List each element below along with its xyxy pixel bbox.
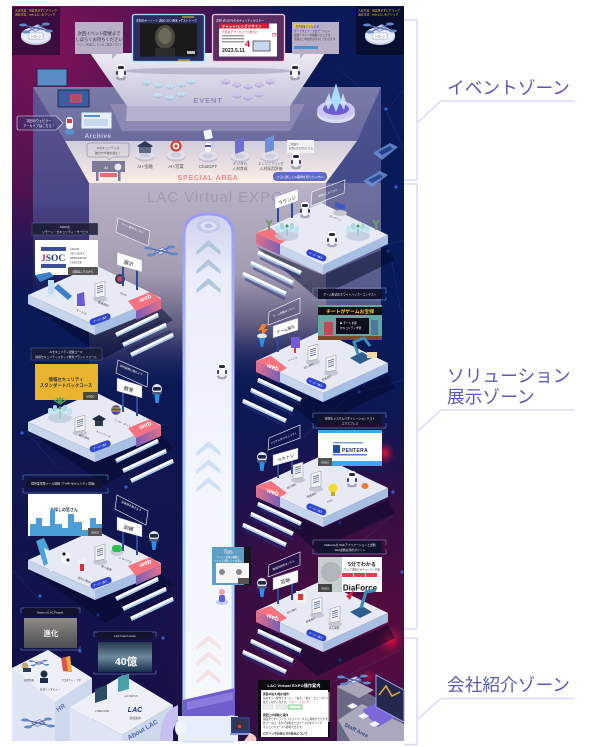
sign: 訓練 (117, 517, 142, 555)
icon: globe: インターネット (113, 418, 132, 428)
callout: JSOC drone (116, 218, 150, 246)
exhibit: ChatGPT (198, 129, 218, 169)
panel: entry guide right (356, 7, 404, 55)
screen: game (318, 305, 382, 340)
icon: crystal podium (317, 83, 355, 123)
sign: 診断 (273, 570, 298, 604)
header: course: 情報セキュリティスタッフ教育プラットフォーム (35, 355, 97, 359)
title: LAC Virtual EXPO: LAC Virtual EXPO (147, 189, 284, 206)
screen: mail training city (0, 494, 102, 536)
screen: yellow course: VIDEO (86, 394, 95, 398)
icon: hover robot (152, 384, 162, 403)
web tag: web (137, 420, 153, 432)
icon: graduation cap: ネットワーク (95, 429, 112, 439)
sign: AI (92, 161, 125, 181)
button: special area link (273, 172, 327, 181)
panel: Tips: ウイルス対策ソフトの違い (214, 558, 242, 562)
panel: bottom center stage (160, 688, 256, 741)
web tag: web (137, 558, 153, 570)
zone: solution: ソリューション (447, 366, 570, 386)
screen: video event: 次回のキーノート 講演 CEO 西本 ×ゲストトーク (136, 18, 197, 22)
screen: JSOC logo: OPERATION (70, 256, 88, 260)
icon: report (305, 597, 324, 624)
icon: report: 関連資料 (306, 491, 318, 499)
icon: report (93, 544, 112, 572)
steps (243, 379, 301, 426)
screen: security event: 2023.5.11 (222, 48, 245, 54)
icon: drone (144, 246, 178, 256)
callout: course: 研究施策に触れよう (119, 364, 144, 377)
callout: Pentera: システムのセキュリティ (270, 431, 298, 445)
icon: certificate: 導入事例 (329, 626, 340, 630)
callout: info bubble: ゲートウェイ・プロモーション (294, 29, 331, 33)
icon: hover robot (257, 578, 267, 597)
zone: event (404, 20, 574, 180)
heading: Staff Area: Staff Area (343, 722, 370, 740)
icon: doc: LAC WATCH (124, 695, 138, 698)
sign: 教育 (117, 378, 142, 416)
background scene (12, 6, 406, 741)
event stage (90, 53, 325, 121)
icon: stamp card (329, 202, 347, 223)
icon: report (321, 355, 338, 382)
screen: Pentera: PENTERA (342, 448, 368, 454)
exhibit: engineer evaluation (258, 135, 285, 171)
panel: hall structure (33, 87, 381, 383)
panel: Vision video (21, 608, 80, 650)
panel: JSOC exhibit (28, 218, 178, 358)
icon: report (93, 281, 109, 308)
header: DiaForce: Web診断必須のポイント (335, 548, 366, 552)
screen: JSOC logo: 詳細はこちらから (73, 270, 94, 274)
screen: DiaForce: DiaForce (343, 584, 378, 592)
screen: game: セキュリティ学習 (340, 326, 362, 330)
header: Pentera: 現場もシステムペネトレーションテスト (325, 416, 375, 420)
event tiles: blue group (142, 79, 196, 101)
screen: Pentera: VIDEO (321, 460, 329, 464)
callout: event waiting message (75, 22, 123, 59)
callout: training (115, 495, 148, 525)
screen: JSOC logo: SECURITY (70, 252, 86, 256)
panel: entry guide left: ドローン (31, 36, 42, 38)
icon: LAC logo: LAC (128, 707, 143, 714)
zone: solution (404, 184, 574, 629)
header: course (31, 348, 102, 360)
callout: course (116, 360, 148, 387)
icon: archive kiosk robot (64, 117, 74, 135)
icon: book (75, 292, 87, 316)
callout: lounge: 休憩はこちらから (317, 187, 338, 198)
sign: AI: AI (104, 165, 108, 170)
icon: doc: CYBER GRID (95, 711, 109, 713)
screen: video event (132, 14, 204, 62)
icon: hover robot (149, 531, 159, 550)
callout: lounge (311, 180, 345, 206)
screen: security event: チャット×シングアサイン (222, 24, 262, 28)
header: DiaForce: DiaForceの Webアプリケーションと診断 (324, 543, 376, 547)
icon: speaker: JSOC (119, 291, 128, 297)
icon: report: 関連資料 (97, 300, 109, 308)
icon: HR interview: 社員インタビュー (40, 687, 60, 691)
screen: security event: !? (272, 33, 277, 39)
panel: About LAC tower (70, 674, 173, 742)
icon: red book: 他社の動向 (77, 576, 92, 585)
button: details (89, 439, 112, 453)
callout: info bubble: 次回開催のお知らせ (295, 24, 319, 28)
zone: solution: 展示ゾーン (447, 387, 535, 407)
icon: left stage robot (116, 64, 126, 80)
callout: info bubble (292, 22, 339, 59)
icon: report (303, 344, 320, 370)
icon: book: サービス (75, 308, 87, 316)
header: DiaForce (313, 540, 386, 554)
heading: EVENT: EVENT (193, 96, 223, 105)
icon: globe (111, 405, 132, 428)
sign: 訓練: 訓練 (123, 524, 134, 533)
screen: security event: 4 (245, 39, 250, 49)
callout: event waiting message: 次回イベント開催まで (78, 30, 120, 37)
exhibit: digital talent (230, 137, 250, 171)
icon: green button: トライアル (118, 556, 133, 565)
icon: phone (36, 538, 58, 572)
callout: robot message: ご相談や (289, 142, 299, 146)
zone: company (404, 638, 574, 744)
panel: Tips: サイバー攻撃の種類と (217, 555, 239, 559)
screen: JSOC logo: JSOC (41, 254, 65, 264)
icon: special area robot (291, 153, 301, 169)
panel: operation guide: するとそのブースへ移動できます。 (263, 725, 304, 729)
icon: hover robot (257, 452, 267, 471)
icon: robot arm (350, 338, 377, 364)
button: Pentera: ブースへ進む (308, 505, 324, 514)
icon: monitor (230, 717, 251, 735)
callout: game: ゲーム体験はこちら (272, 306, 296, 318)
panel: operation guide: 画面の拡大/縮小操作 (263, 692, 289, 696)
icon: report: 関連資料 (305, 616, 317, 624)
panel: special area (65, 129, 357, 183)
icon: report: 関連資料 (321, 374, 333, 382)
button: game: ブースへ進む (308, 379, 324, 388)
panel: LAC brand video: 40億 (115, 655, 138, 668)
panel: Staff Area (337, 674, 404, 741)
header: JSOC: JSOCの (60, 225, 70, 229)
icon: report (286, 462, 305, 490)
icon: satellite (35, 272, 72, 300)
steps (116, 314, 173, 355)
icon: table and plant (48, 397, 72, 423)
screen: DiaForce: ウェブ診断のセキュリティ対策 (344, 568, 380, 572)
icons: floating cars (363, 143, 398, 187)
zone: event: イベントゾーン (447, 78, 570, 98)
exhibit: ChatGPT: ChatGPT (199, 164, 217, 169)
icon: panda robot (61, 552, 71, 564)
screen: mail training city: VIDEO (91, 530, 99, 534)
icon: report: 紹介資料 (78, 433, 90, 441)
button: details (90, 576, 112, 590)
panel: entry guide left: 入室方法：何度見せずにクリック (15, 8, 57, 12)
screen: DiaForce (318, 557, 382, 592)
exhibit: AI x sales: AI×営業 (168, 163, 184, 170)
icon: report: 紹介資料 (303, 362, 315, 370)
header: JSOC: リモート・セキュリティ・サービス (42, 229, 88, 234)
screen: security event: 次回 ゼロからのセキュリティセミナー (216, 18, 264, 22)
steps (243, 630, 301, 677)
panel: operation guide: 拡大しながら見ます。スマートフォンで (263, 700, 310, 704)
exhibit: AI x sales (166, 140, 186, 170)
screen: mail training city: お探しの皆さん (50, 506, 78, 512)
panel: operation guide: 画面全てをドラッグ（スライド）すると移動ができます。 (263, 717, 330, 721)
icon: HR product: プロダクト・ラボ (61, 678, 81, 682)
icon: right stage robot (290, 64, 300, 80)
screen: yellow course: 情報セキュリティ (49, 376, 83, 383)
button: details: ブースへ進む (92, 579, 108, 588)
sign: 展示: 展示 (123, 260, 134, 268)
callout: webinar archive: 次回のウェビナー (26, 118, 52, 123)
icon: stamp card: オンライン (329, 214, 343, 223)
sign: 教育: 教育 (123, 385, 134, 394)
callout: JSOC drone: ライン見学はこちら (120, 222, 145, 235)
icon: large drone (21, 718, 55, 728)
header: JSOC (32, 223, 98, 235)
icon: staff drone (337, 674, 371, 686)
exhibit: engineer evaluation: エンジニアリング (258, 161, 285, 166)
callout: training: 従業員を鍛えよう (121, 500, 142, 512)
icon: green button (110, 545, 133, 565)
callout: special area intro: AIセキュリティの (97, 145, 120, 150)
panel: LAC brand video (94, 632, 156, 674)
header: game: ゲーム形式のホワイトハッカーコンテスト (323, 292, 377, 296)
callout: webinar archive: アーカイブはこちら！ (23, 123, 55, 128)
button: details: ブースへ進む (92, 442, 108, 451)
screen: security event (212, 14, 284, 62)
archive screens (37, 69, 112, 129)
header: course: AIセキュリティ試験コース (49, 350, 83, 354)
sign: ペネトレ: ペネトレ (277, 453, 295, 464)
sign: ゲーム展示: ゲーム展示 (276, 324, 296, 335)
icon: light bulb (326, 484, 338, 504)
callout: event waiting message: しばらくお待ちください (75, 36, 123, 43)
icon: report (306, 471, 323, 499)
panel: entry guide right: 過去方法：web上に□をクリック (358, 12, 399, 16)
callout: game (268, 298, 300, 325)
chevrons: middle (196, 441, 220, 492)
screen: yellow course: スタンダードパックコース (40, 382, 93, 389)
button: DiaForce (305, 628, 327, 642)
sign: 診断: 診断 (280, 576, 291, 586)
panel: operation guide: 画面上の移動と操作 (263, 713, 288, 717)
sign: ラウンジ (275, 189, 298, 222)
callout: info bubble: 最新イベントを開催いたします (294, 33, 331, 37)
sign: 展示 (117, 252, 142, 290)
chevrons: bottom (196, 635, 220, 684)
icon: runway robot (217, 363, 227, 379)
screen: JSOC logo (35, 240, 98, 275)
button: special area link: さらに詳しくAI事例を知りたい方へ (276, 174, 324, 179)
icon: LAC logo: 会社案内 (129, 716, 141, 720)
panel: Tips: Tips (223, 550, 233, 556)
steps (116, 440, 173, 481)
panel: Tips (212, 547, 251, 585)
panel: HR tower (12, 650, 92, 741)
panel: Vision video: Vision of LAC People (37, 610, 64, 614)
panel: operation guide: ログインやお知らせの表示について (263, 732, 308, 736)
callout: info bubble: 皆様のご参加をお待ちしております (294, 37, 336, 41)
sign: ゲーム展示 (273, 318, 298, 352)
panel: operation guide (258, 680, 334, 737)
header: Pentera: エクスプレス (342, 422, 359, 426)
web tag: web (137, 293, 153, 305)
icon: purple flag: イベント (287, 355, 299, 363)
callout: webinar archive (17, 116, 63, 130)
panel: LAC brand video: LAC brand movie (114, 634, 136, 638)
steps (243, 252, 301, 299)
heading: HR: HR (55, 703, 67, 714)
button: DiaForce: ブースへ進む (308, 631, 324, 640)
heading: SPECIAL AREA: SPECIAL AREA (178, 173, 238, 182)
icon: report (73, 415, 90, 441)
sign: ラウンジ: ラウンジ (277, 194, 297, 207)
icon: LAC logo (128, 707, 143, 720)
icon: lounge tables (266, 220, 379, 241)
exhibit: AI x finance: AI×金融 (137, 163, 153, 170)
icon: tips robot (216, 589, 228, 605)
panel: Pentera exhibit (243, 413, 395, 551)
panel: entry guide right: ドローン (375, 36, 386, 38)
callout: DiaForce: 脆弱性診断はこちら (272, 559, 296, 571)
screen: security event: 今回はテクノロジーの進化に (222, 30, 258, 34)
callout: special area intro (87, 143, 129, 160)
screen: DiaForce: 5分でわかる (348, 561, 376, 568)
web tag: web (264, 487, 280, 498)
button: Pentera (305, 502, 327, 516)
icon: red stamp (286, 591, 306, 615)
icon: red stamp: 紹介資料 (286, 607, 298, 615)
web tag: web (264, 362, 280, 373)
icon: flame robot (257, 324, 268, 347)
icon: robots (347, 471, 368, 489)
screen: JSOC logo: JAPAN (70, 247, 80, 251)
chevrons: top (196, 240, 220, 293)
screen: mail training city: メール訓練サービス (52, 500, 83, 505)
icon: report: 導入事例 (100, 564, 112, 572)
icon: purple flag (287, 337, 300, 363)
icon: red book (77, 558, 92, 585)
panel: Vision video: 進化 (44, 628, 59, 638)
web tag: web (264, 612, 280, 623)
zone: company: 会社紹介ゾーン (447, 675, 570, 695)
icon: HR drone (29, 660, 49, 666)
icon: graduation cap (92, 415, 112, 439)
icon: speaker (115, 274, 128, 297)
icon: lounge robot (300, 202, 310, 218)
panel: mail training exhibit (0, 475, 173, 623)
panel: entry guide right: 入室方法：何度見せずにクリック (358, 8, 400, 12)
heading: Archive: Archive (84, 133, 112, 140)
callout: Pentera (268, 425, 300, 450)
panel: operation guide: 左右を下へ操作でズーム→「拡大」「拡大→ビューポイント」 (263, 696, 334, 700)
screen: game: チートがゲームお宝探 (326, 308, 374, 315)
panel: game exhibit (243, 288, 395, 426)
button: lounge (305, 248, 327, 262)
event tiles: purple group (222, 79, 274, 101)
screen: Pentera (318, 430, 382, 466)
button: details: ブースへ進む (92, 315, 108, 324)
steps (116, 578, 173, 619)
header: mail training: 標的型攻撃メール訓練「T-MR-セキュリティ意識」 (31, 480, 97, 486)
screen: DiaForce: VIDEO (321, 586, 329, 590)
steps (243, 503, 301, 550)
exhibit: engineer evaluation: 人材採用評価 (260, 166, 283, 171)
screen: yellow course (35, 364, 98, 400)
header: game (313, 288, 386, 300)
panel: DiaForce exhibit (243, 540, 395, 677)
header: Pentera (313, 413, 386, 428)
callout: event waiting message: イベント情報はこちらをご確認ください (76, 42, 123, 46)
sign: ペネトレ (273, 448, 298, 478)
button: lounge: ブースへ進む (308, 251, 324, 260)
panel: lounge (243, 180, 395, 299)
panel: entry guide left: 過去方法：web上に□をクリック (15, 12, 56, 16)
panel: standard pack exhibit (28, 348, 173, 485)
screen: JSOC logo: CENTER (70, 260, 82, 264)
exhibit: digital talent: 人材育成 (232, 166, 248, 171)
icon: floor robot (327, 231, 337, 247)
heading: About LAC: About LAC (126, 719, 160, 742)
icon: light bulb: TIPS (326, 498, 333, 504)
callout: DiaForce (268, 552, 300, 577)
callout: robot message (287, 140, 314, 153)
runway (184, 214, 233, 741)
icon: certificate (328, 606, 342, 630)
panel: operation guide: LAC Virtual EXPO操作案内 (268, 682, 320, 688)
icon: robot arm (346, 590, 376, 618)
header: mail training (23, 475, 108, 493)
button: details (89, 312, 112, 326)
button: game (305, 376, 327, 390)
icon: report: 紹介資料 (286, 482, 298, 490)
exhibit: digital talent: デジタル (232, 161, 248, 166)
screen: game: ▶ チートを探 (340, 321, 357, 325)
panel: operation guide: 各ブースは、矢印で移動またはブース名をクリック (263, 721, 323, 725)
callout: robot message: お問い合わせはこちら (289, 146, 314, 150)
panel: entry guide left (12, 7, 60, 55)
callout: special area intro: 魅力や今後の話も！ (95, 150, 121, 155)
exhibit: AI x finance (136, 141, 154, 170)
icon: HR person: 採用情報 (24, 678, 34, 682)
